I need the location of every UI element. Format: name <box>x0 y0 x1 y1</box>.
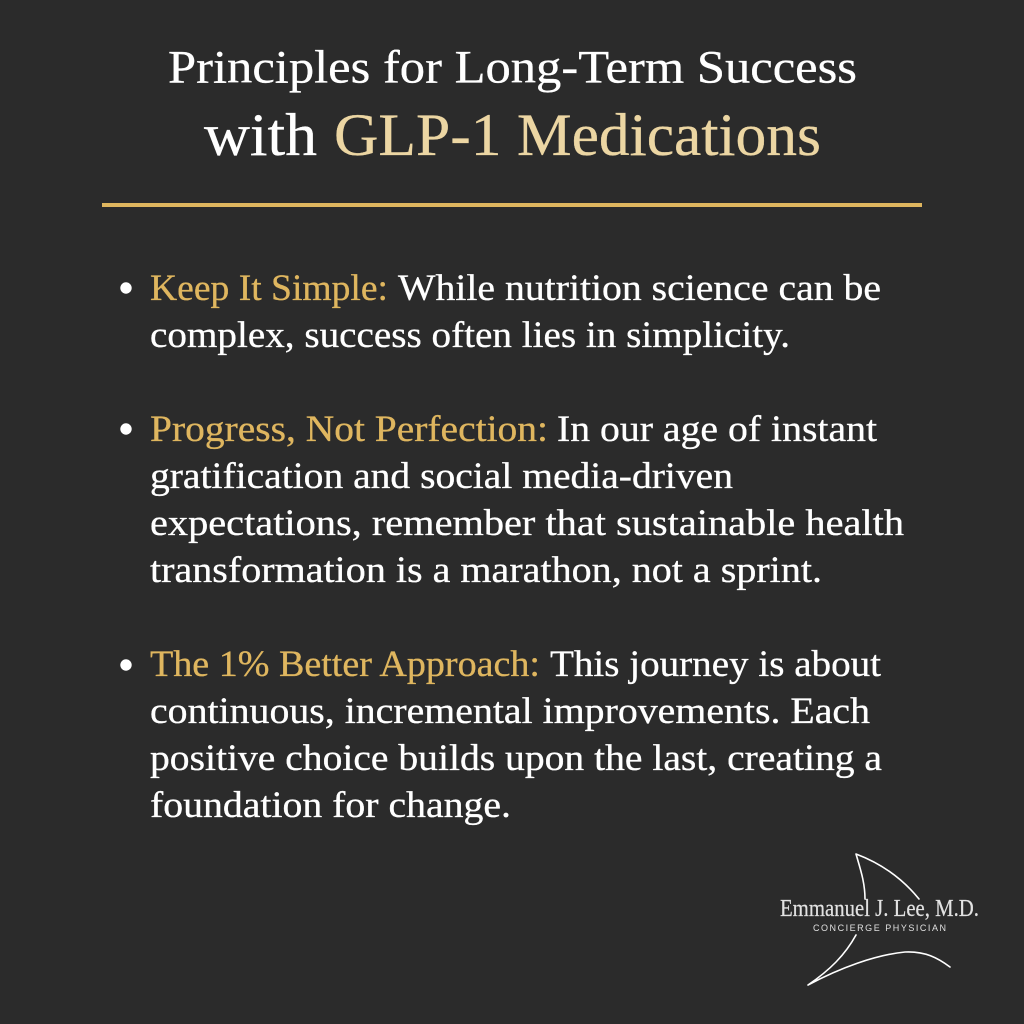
bullet item: Progress, Not Perfection: gratification and social media-driven <box>150 456 733 497</box>
bullet item: Keep It Simple: complex, success often lies in simplicity. <box>150 315 790 356</box>
bullet item: The 1% Better Approach: This journey is about <box>550 644 882 685</box>
title: GLP-1 Medications <box>334 102 821 168</box>
title <box>168 42 857 168</box>
panel: principles list <box>120 268 905 826</box>
bullet item: Progress, Not Perfection: transformation is a marathon, not a sprint. <box>150 550 822 591</box>
bullet item: The 1% Better Approach: The 1% Better Approach: <box>150 644 540 685</box>
icon: fin curves <box>808 854 950 985</box>
bullet item: The 1% Better Approach <box>120 644 882 826</box>
bullet item: Keep It Simple: While nutrition science can be <box>398 268 881 309</box>
bullet item: The 1% Better Approach: positive choice builds upon the last, creating a <box>150 738 882 779</box>
bullet item: Progress, Not Perfection: Progress, Not Perfection: <box>150 409 548 450</box>
bullet item: Keep It Simple <box>120 268 881 356</box>
title: with <box>204 102 317 168</box>
logo subtitle: CONCIERGE PHYSICIAN <box>813 923 946 933</box>
bullet item: Progress, Not Perfection <box>120 409 905 591</box>
bullet item: The 1% Better Approach: foundation for change. <box>150 785 511 826</box>
bullet item: Progress, Not Perfection: In our age of instant <box>557 409 878 450</box>
bullet item: The 1% Better Approach: continuous, incremental improvements. Each <box>150 691 871 732</box>
logo: Emmanuel J. Lee, M.D. <box>780 854 979 985</box>
title: Principles for Long-Term Success <box>168 42 857 94</box>
bullet item: Progress, Not Perfection: expectations, remember that sustainable health <box>150 503 905 544</box>
bullet item: Keep It Simple: Keep It Simple: <box>150 268 388 309</box>
logo name: Emmanuel J. Lee, M.D. <box>780 896 979 922</box>
